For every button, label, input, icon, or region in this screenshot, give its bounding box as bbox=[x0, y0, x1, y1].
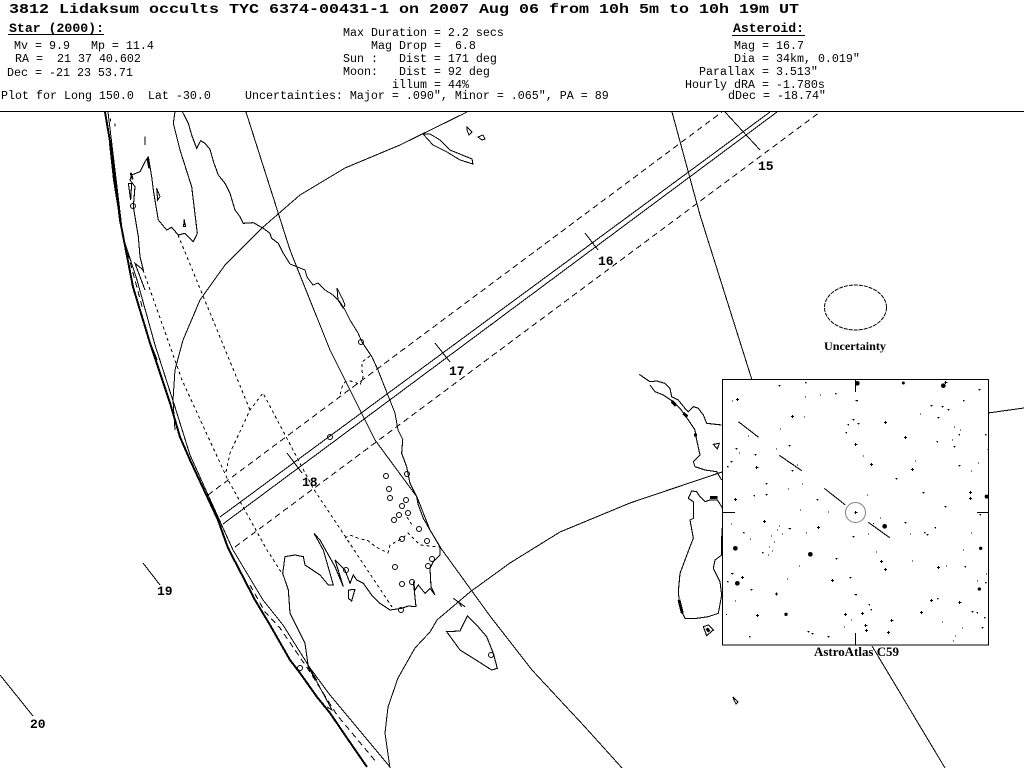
coast: northern and western Australia bbox=[110, 112, 290, 360]
event data block: Mag Drop = 6.8 bbox=[371, 39, 476, 53]
asteroid data block: Dia = 34km, 0.019" bbox=[734, 52, 860, 66]
hour labels: 15 bbox=[758, 159, 774, 174]
hour labels: 20 bbox=[30, 717, 46, 732]
hour labels: 19 bbox=[157, 584, 173, 599]
hour labels: 18 bbox=[302, 475, 318, 490]
header rule bbox=[0, 110, 1024, 112]
event data block: illum = 44% bbox=[392, 78, 469, 92]
observatory circles bbox=[130, 204, 494, 670]
New Zealand bbox=[639, 374, 723, 636]
uncertainty ellipse bbox=[824, 285, 886, 353]
star data block: Dec = -21 23 53.71 bbox=[7, 66, 133, 80]
coast: south-east Australia, Tasmania bbox=[283, 440, 497, 680]
star data block: Mv = 9.9 Mp = 11.4 bbox=[14, 39, 154, 53]
star field bbox=[726, 381, 989, 641]
time ticks bbox=[0, 112, 760, 716]
asteroid heading: Asteroid: bbox=[733, 22, 804, 36]
small island off Queensland bbox=[337, 288, 345, 308]
star heading: Star (2000): bbox=[9, 22, 104, 36]
event data block: Max Duration = 2.2 secs bbox=[343, 26, 504, 40]
Cape York peninsula tip, south-west bbox=[308, 667, 332, 710]
star data block bbox=[1, 22, 211, 103]
inset star chart bbox=[722, 380, 989, 659]
hour labels bbox=[30, 159, 774, 732]
occultation shadow path: centre lines and limits bbox=[208, 112, 820, 547]
asteroid data block: Parallax = 3.513" bbox=[699, 65, 818, 79]
hour labels: 17 bbox=[449, 364, 465, 379]
star data block: Plot for Long 150.0 Lat -30.0 bbox=[1, 89, 211, 103]
path of asteroid across chart bbox=[738, 422, 890, 538]
star data block: RA = 21 37 40.602 bbox=[15, 52, 141, 66]
earth limb bbox=[105, 112, 390, 767]
hour labels: 16 bbox=[598, 254, 614, 269]
uncertainty label: Uncertainty bbox=[824, 340, 886, 353]
asteroid data block: Mag = 16.7 bbox=[734, 39, 804, 53]
coast: eastern Australia bbox=[290, 264, 403, 440]
event data block: Uncertainties: Major = .090", Minor = .065", PA = 89 bbox=[245, 89, 609, 103]
asteroid data block bbox=[685, 22, 860, 103]
event data block: Sun : Dist = 171 deg bbox=[343, 52, 497, 66]
event data block: Moon: Dist = 92 deg bbox=[343, 65, 490, 79]
chart label: AstroAtlas C59 bbox=[814, 644, 899, 659]
interior dashed boundaries bbox=[143, 235, 440, 607]
target star circle bbox=[846, 502, 866, 522]
asteroid data block: Hourly dRA = -1.780s bbox=[685, 78, 825, 92]
event data block bbox=[245, 26, 609, 103]
asteroid data block: dDec = -18.74" bbox=[728, 89, 826, 103]
New Caledonia and islands bbox=[423, 127, 738, 704]
chart centre ticks bbox=[723, 380, 988, 645]
visibility limit curves bbox=[173, 112, 1024, 768]
title: 3812 Lidaksum occults TYC 6374-00431-1 on 2007 Aug 06 from 10h 5m to 10h 19m UT bbox=[9, 2, 799, 18]
